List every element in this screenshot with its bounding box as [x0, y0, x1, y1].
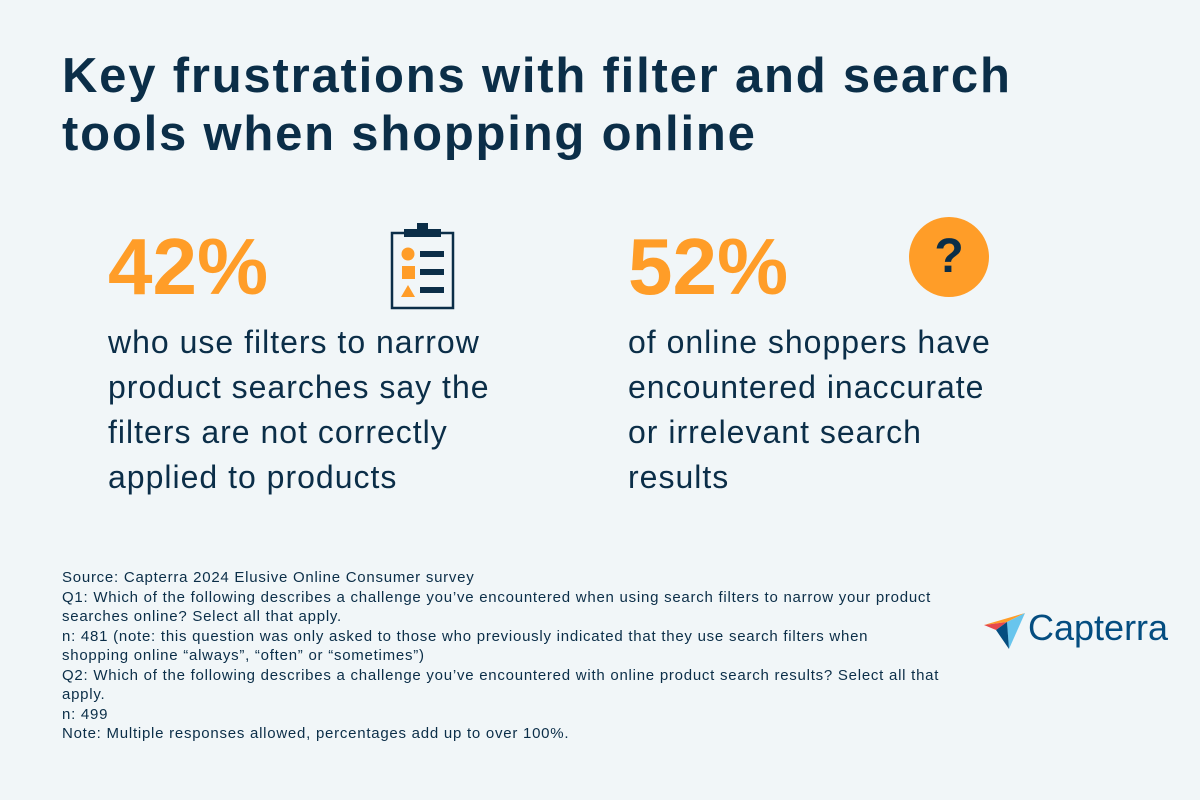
footnote: Note: Multiple responses allowed, percentages add up to over 100%.	[62, 725, 569, 742]
panel: filters stat	[108, 222, 490, 495]
footnote: shopping online “always”, “often” or “sometimes”)	[62, 647, 425, 664]
panel: search stat	[628, 222, 991, 495]
title: tools when shopping online	[62, 107, 757, 161]
description right: of online shoppers have encountered inaccurate or irrelevant search results	[628, 324, 991, 495]
title	[62, 49, 1012, 161]
percentage 52: 52%	[628, 222, 788, 311]
footnote: n: 481 (note: this question was only asked to those who previously indicated that they use search filters when	[62, 628, 868, 644]
footnote: searches online? Select all that apply.	[62, 608, 342, 625]
footnote: Q2: Which of the following describes a challenge you’ve encountered with online product search results? Select all that	[62, 666, 939, 684]
logo: Capterra: Capterra	[1028, 607, 1168, 648]
title: Key frustrations with filter and search	[62, 49, 1012, 103]
percentage 42: 42%	[108, 222, 268, 311]
icon: clipboard	[390, 223, 454, 310]
footnote: apply.	[62, 686, 105, 703]
icon: question mark: ?	[934, 230, 964, 283]
icon: question mark	[909, 217, 989, 297]
footnote: Source: Capterra 2024 Elusive Online Consumer survey	[62, 569, 475, 586]
description left: who use filters to narrow product searches say the filters are not correctly applied to products	[108, 324, 490, 495]
footnote: n: 499	[62, 706, 108, 722]
footnote: Q1: Which of the following describes a challenge you’ve encountered when using search filters to narrow your product	[62, 588, 931, 606]
footnote	[62, 569, 939, 742]
